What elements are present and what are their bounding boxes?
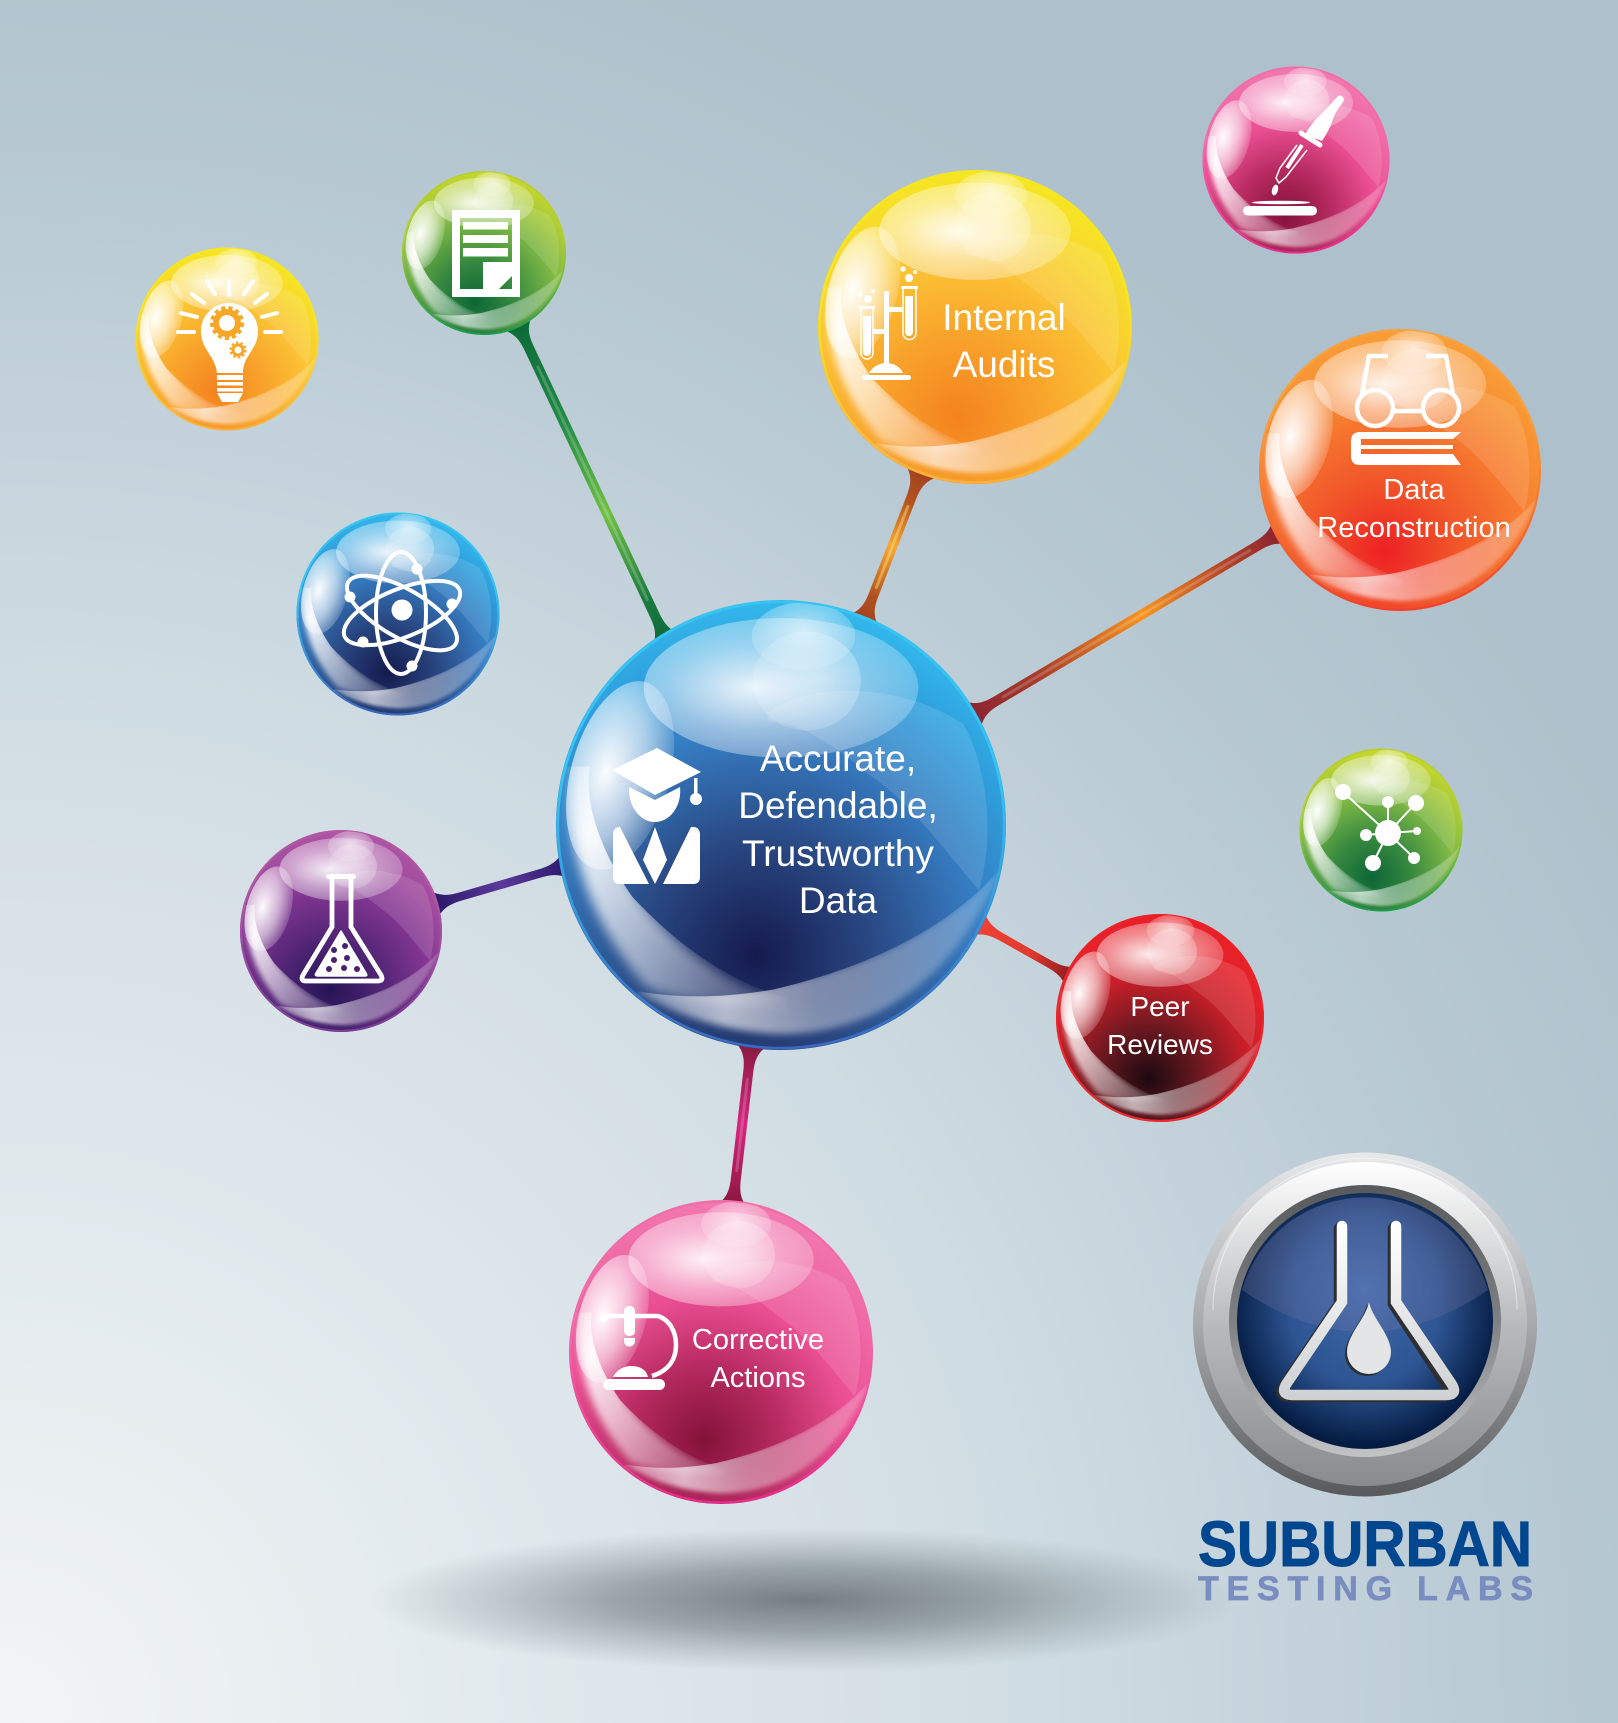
sphere: pink small	[1199, 66, 1390, 253]
icon: pipette and dish	[1243, 96, 1344, 216]
sphere: yellow large	[812, 170, 1132, 484]
panel: network sphere	[1296, 748, 1462, 912]
sphere: purple	[236, 830, 442, 1032]
panel: internal audits sphere	[812, 170, 1132, 484]
label: Accurate, Defendable, Trustworthy Data: Accurate,	[760, 738, 916, 779]
label: Internal Audits: Internal	[942, 297, 1066, 338]
icon: microscope	[600, 1306, 676, 1390]
label: Accurate, Defendable, Trustworthy Data: Trustworthy	[742, 833, 934, 874]
icon: graduate	[612, 748, 702, 884]
panel: document sphere	[399, 171, 566, 335]
icon: test tubes on stand	[857, 266, 918, 380]
logo wordmark	[1198, 1508, 1533, 1608]
connector: central to corrective actions	[719, 1044, 765, 1207]
panel: data reconstruction sphere	[1254, 329, 1541, 611]
logo: Suburban Testing Labs	[1193, 1152, 1537, 1608]
panel: peer reviews sphere	[1052, 914, 1264, 1122]
panel: corrective actions sphere	[563, 1200, 873, 1504]
panel: lightbulb sphere	[132, 248, 318, 430]
label: Data Reconstruction: Reconstruction	[1317, 512, 1511, 544]
icon: network	[1335, 784, 1424, 871]
label: Internal Audits: Audits	[953, 344, 1055, 385]
logo wordmark: SUBURBAN	[1198, 1508, 1532, 1580]
label: Corrective Actions: Actions	[710, 1362, 806, 1394]
label: Accurate, Defendable, Trustworthy Data: Defendable,	[738, 785, 938, 826]
connector: central to data reconstruction	[967, 521, 1287, 726]
icon: document	[456, 214, 516, 293]
connector: central to internal audits	[851, 468, 934, 624]
icon: glasses on book	[1351, 356, 1461, 465]
sphere: green small	[1296, 748, 1462, 912]
icon: flask with drop	[1281, 1226, 1454, 1397]
connector: central to document	[505, 319, 679, 645]
connector: central to peer reviews	[975, 915, 1076, 986]
logo wordmark: TESTING LABS	[1198, 1570, 1533, 1608]
icon: conical flask	[302, 874, 382, 981]
sphere: yellow	[132, 248, 318, 430]
panel: flask sphere	[236, 830, 442, 1032]
logo badge	[1193, 1152, 1537, 1496]
sphere: orange	[1254, 329, 1541, 611]
panel: central sphere	[547, 600, 1006, 1050]
label: Peer Reviews: Reviews	[1107, 1029, 1213, 1060]
floor shadow	[370, 1528, 1240, 1672]
panel: pipette sphere	[1199, 66, 1390, 253]
icon: atom	[336, 552, 468, 674]
connector: central to flask sphere	[433, 855, 567, 915]
panel: atom sphere	[293, 512, 500, 716]
label: Peer Reviews: Peer	[1130, 991, 1190, 1022]
sphere: blue small	[293, 512, 500, 716]
sphere: green	[399, 171, 566, 335]
sphere: red	[1052, 914, 1264, 1122]
sphere: blue large	[547, 600, 1006, 1050]
label: Corrective Actions: Corrective	[692, 1324, 824, 1356]
label: Data Reconstruction: Data	[1383, 474, 1445, 506]
icon: lightbulb with gears	[178, 280, 281, 402]
label: Accurate, Defendable, Trustworthy Data: Data	[799, 880, 877, 921]
sphere: pink large	[563, 1200, 873, 1504]
